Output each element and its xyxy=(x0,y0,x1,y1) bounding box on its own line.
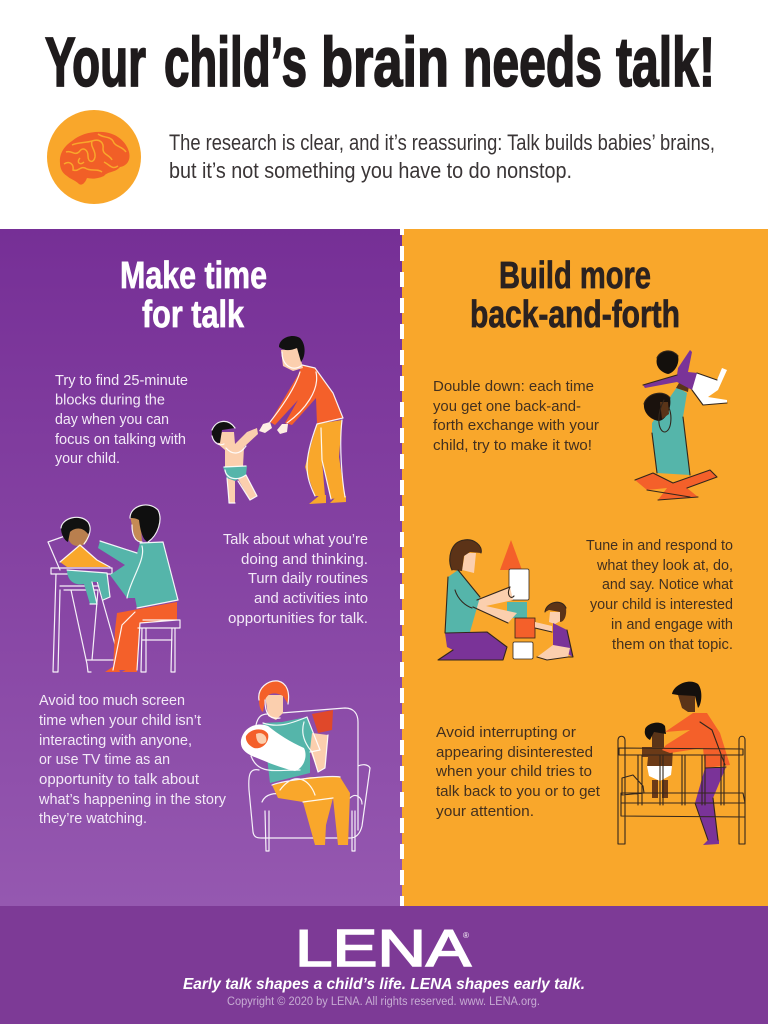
text: avoid too much screen time: interacting with anyone, xyxy=(39,732,192,749)
text: avoid too much screen time: they’re watching. xyxy=(39,810,147,827)
heading: build more back-and-forth xyxy=(470,255,680,336)
panel: make time for talk xyxy=(0,229,402,906)
text: avoid too much screen time: Avoid too much screen xyxy=(39,692,185,709)
text: double down xyxy=(433,378,599,454)
text: double down: forth exchange with your xyxy=(433,417,599,434)
text: talk about what you're doing: Turn daily routines xyxy=(248,570,368,587)
panel: build more back-and-forth xyxy=(402,229,768,906)
text: 25-minute blocks: Try to find 25-minute xyxy=(55,372,188,389)
text: talk about what you're doing: opportunities for talk. xyxy=(228,610,368,627)
title: needs xyxy=(463,23,602,101)
illustration: parent and child building blocks xyxy=(438,540,573,660)
title: child’s xyxy=(164,23,307,101)
text: double down: you get one back-and- xyxy=(433,398,581,415)
icon: brain xyxy=(47,110,141,204)
text: tune in and respond: and say. Notice what xyxy=(602,576,734,593)
text: avoid too much screen time: time when your child isn’t xyxy=(39,712,202,729)
tagline: Early talk shapes a child’s life. LENA shapes early talk. xyxy=(183,976,585,993)
logo: LENA: ® xyxy=(463,931,469,940)
text: avoid too much screen time: opportunity to talk about xyxy=(39,771,200,788)
dashed divider xyxy=(400,220,404,906)
text: talk about what you're doing: doing and thinking. xyxy=(241,551,368,568)
illustration: parent reading with newborn in armchair xyxy=(241,681,370,851)
text: tune in and respond: your child is interested xyxy=(590,596,733,613)
title: Your xyxy=(45,23,146,101)
text: double down: Double down: each time xyxy=(433,378,594,395)
copyright: Copyright © 2020 by LENA. All rights reserved. www. LENA.org. xyxy=(227,996,540,1008)
panel: footer xyxy=(0,906,768,1024)
text: tune in and respond xyxy=(586,537,734,653)
text: avoid interrupting: appearing disinterested xyxy=(436,744,593,761)
text: talk about what you're doing: and activities into xyxy=(254,590,368,607)
logo: LENA: LENA xyxy=(295,920,471,978)
heading: build more back-and-forth: Build more xyxy=(499,255,651,297)
text: avoid interrupting: Avoid interrupting or xyxy=(436,724,576,741)
text: 25-minute blocks: day when you can xyxy=(55,411,169,428)
text: 25-minute blocks: focus on talking with xyxy=(55,431,186,448)
heading: make time for talk xyxy=(120,255,267,336)
text: avoid too much screen time: what’s happening in the story xyxy=(38,791,226,808)
intro text xyxy=(169,130,715,183)
text: 25-minute blocks xyxy=(55,372,188,467)
heading: build more back-and-forth: back-and-forth xyxy=(470,294,680,336)
text: talk about what you're doing xyxy=(223,531,368,627)
text: tune in and respond: in and engage with xyxy=(611,616,733,633)
text: avoid interrupting xyxy=(435,724,601,820)
text: avoid interrupting: when your child tries to xyxy=(435,763,592,780)
text: 25-minute blocks: blocks during the xyxy=(55,392,165,408)
text: talk about what you're doing: Talk about what you’re xyxy=(223,531,368,548)
heading: make time for talk: Make time xyxy=(120,255,267,297)
title: brain xyxy=(321,23,449,101)
illustration: parent with child in crib xyxy=(618,682,745,845)
illustration: father holding toddler's hands xyxy=(212,336,346,504)
intro text: but it’s not something you have to do nonstop. xyxy=(169,158,572,183)
text: tune in and respond: them on that topic. xyxy=(612,636,733,653)
title xyxy=(45,23,715,101)
illustration: parent feeding child in high chair xyxy=(48,505,180,672)
heading: make time for talk: for talk xyxy=(142,294,245,336)
text: 25-minute blocks: your child. xyxy=(55,450,120,467)
text: avoid interrupting: your attention. xyxy=(436,803,534,820)
title: talk! xyxy=(616,23,715,101)
text: double down: child, try to make it two! xyxy=(433,437,592,454)
text: avoid interrupting: talk back to you or to get xyxy=(436,783,601,800)
illustration: parent lifting child overhead xyxy=(635,350,727,500)
text: tune in and respond: what they look at, do, xyxy=(596,557,733,574)
text: tune in and respond: Tune in and respond to xyxy=(586,537,733,554)
text: avoid too much screen time xyxy=(38,692,226,827)
text: avoid too much screen time: or use TV time as an xyxy=(39,751,170,768)
